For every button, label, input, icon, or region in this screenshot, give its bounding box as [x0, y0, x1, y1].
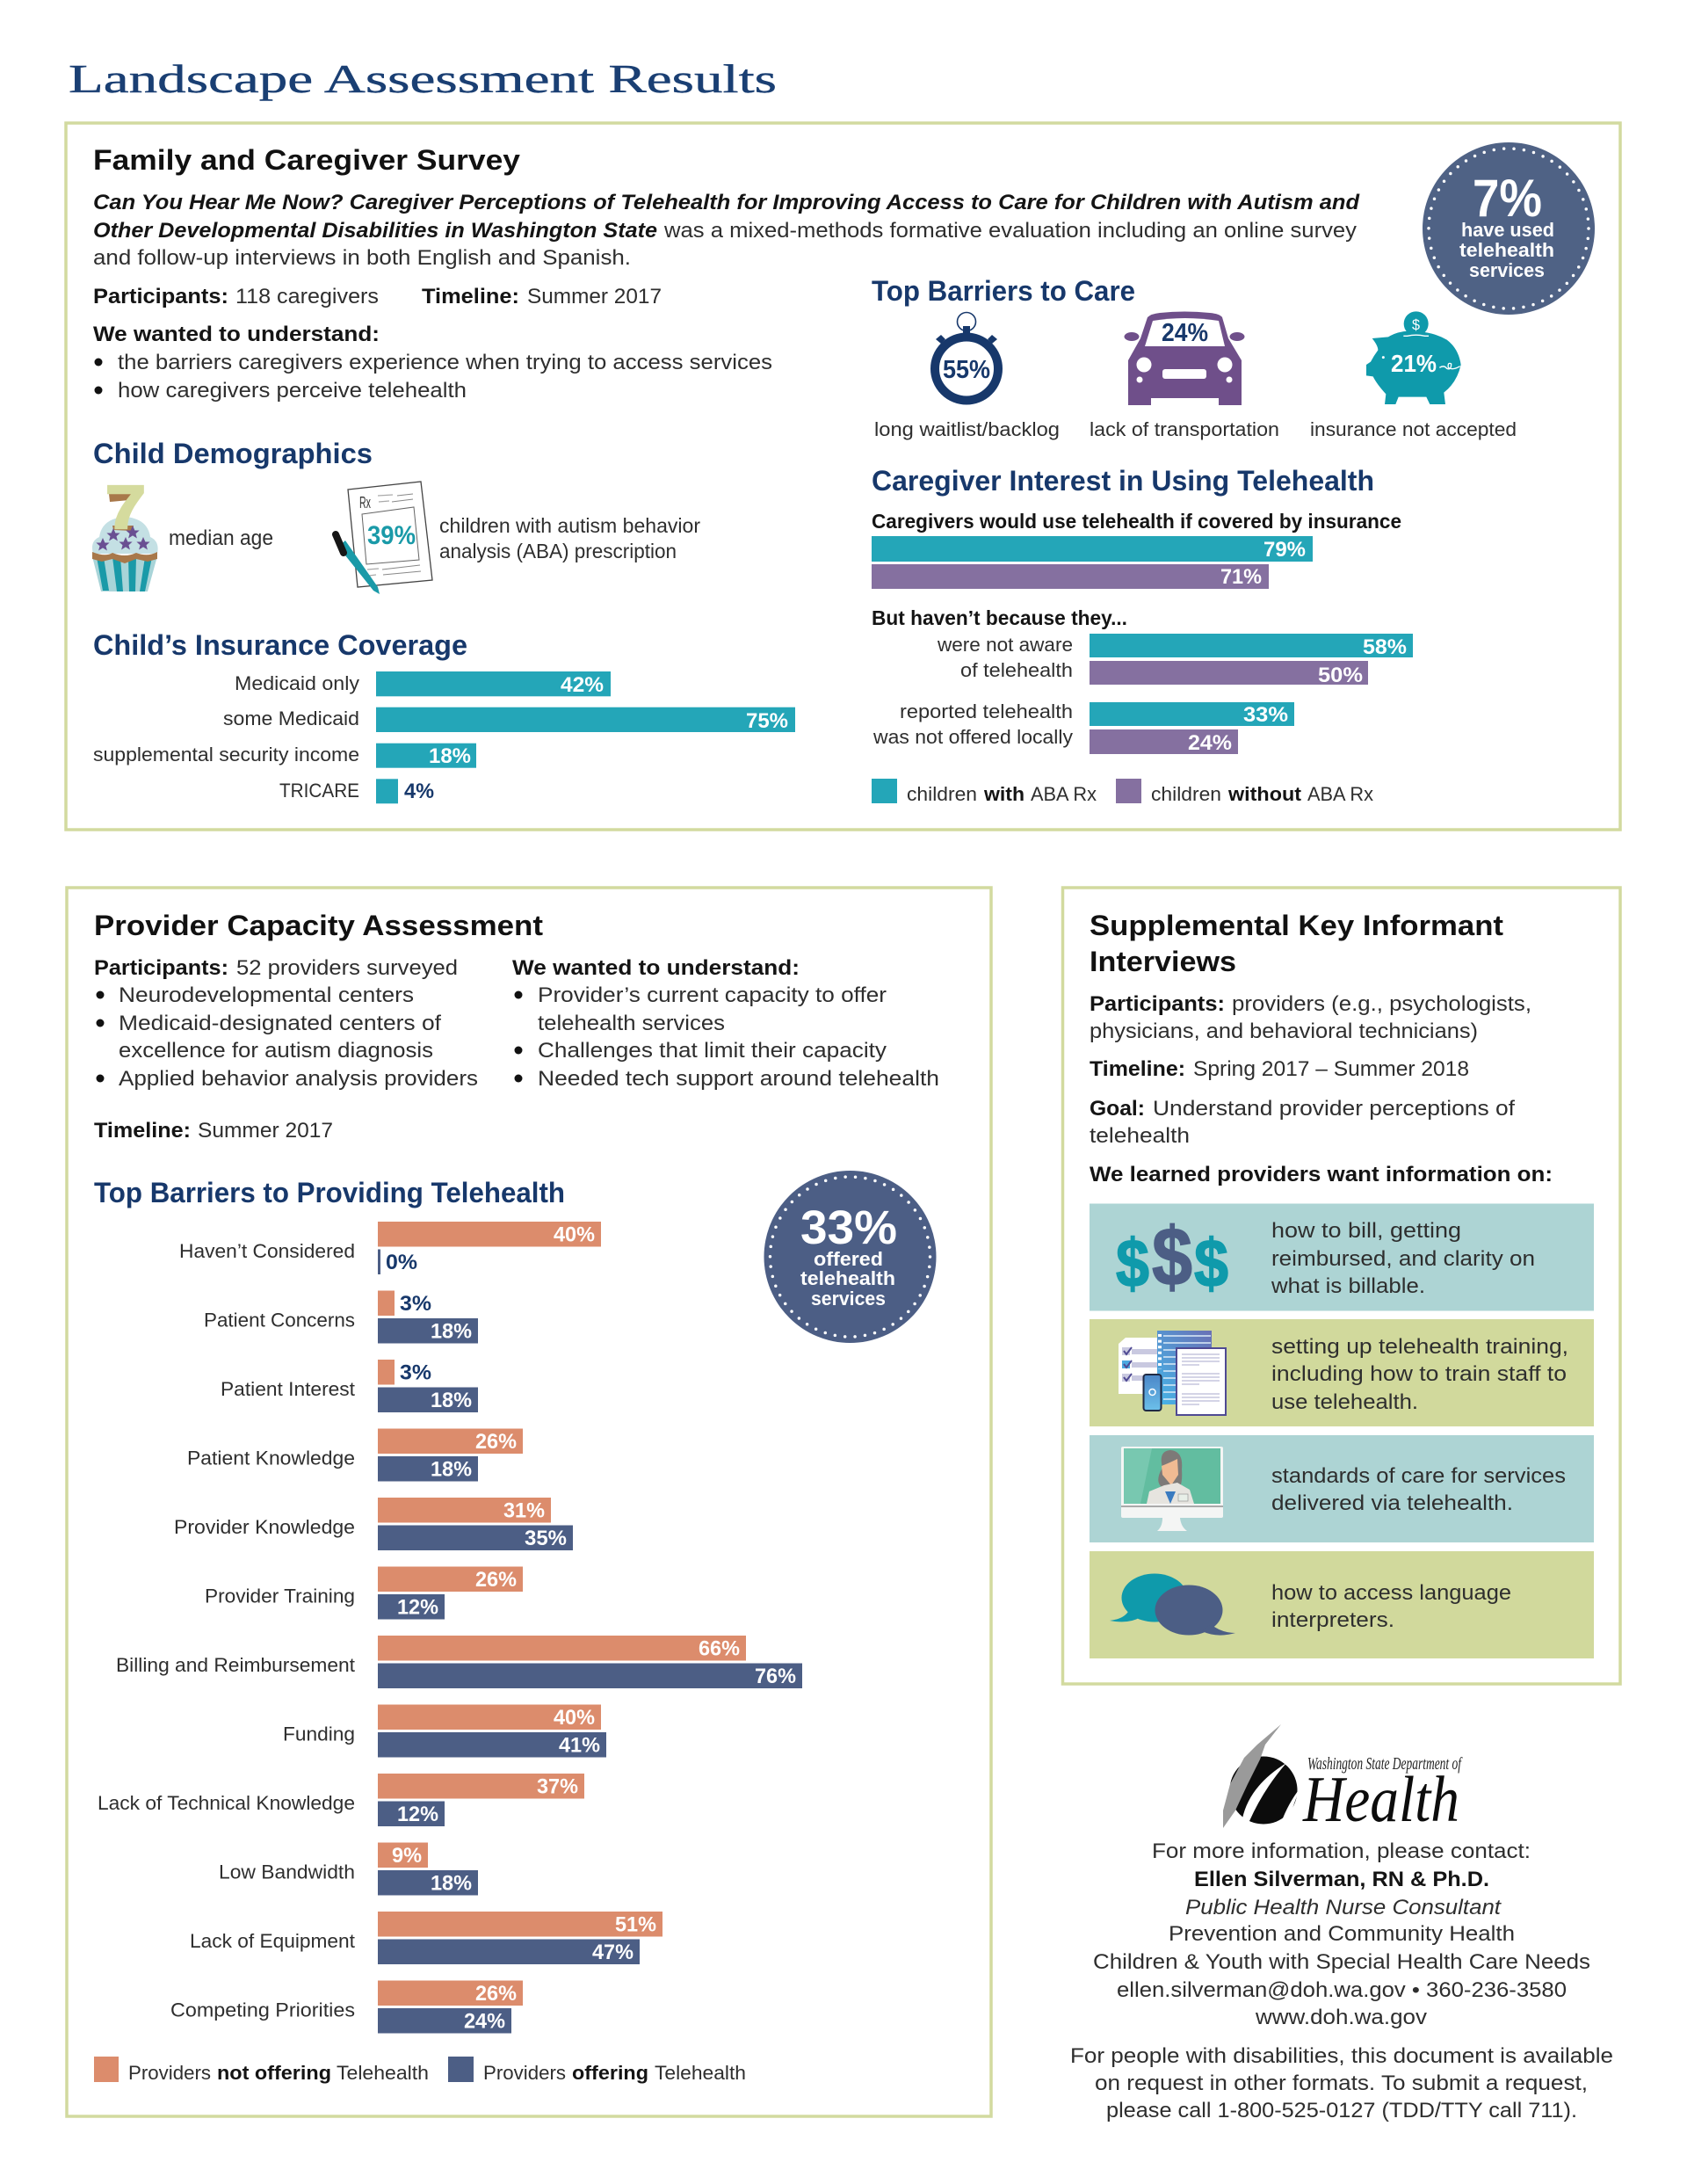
row: patient knowledge — [187, 1429, 523, 1482]
icon: piggy bank 21 percent: 21% — [1391, 350, 1437, 377]
bar chart: caregivers would use telehealth — [872, 510, 1401, 589]
heading: child's insurance coverage: Child’s Insurance Coverage — [93, 629, 467, 661]
card: billing information: how to bill, getting — [1271, 1219, 1461, 1243]
bar chart: insurance coverage — [93, 671, 795, 803]
bar chart: why caregivers have not used telehealth: 33% — [1243, 703, 1288, 727]
row: lack of technical knowledge: Lack of Technical Knowledge — [98, 1792, 355, 1814]
badge: 33 percent offered telehealth: offered — [814, 1248, 883, 1270]
row: funding: 40% — [554, 1706, 595, 1730]
survey description: Can You Hear Me Now? Caregiver Perceptions of Telehealth for Improving Access to Care for Children with Autism and — [93, 191, 1360, 214]
contact information: Children & Youth with Special Health Care Needs — [1093, 1950, 1590, 1974]
participants list: Neurodevelopmental centers — [119, 983, 414, 1007]
icon: prescription pad with 39 percent: Rx — [359, 494, 371, 512]
row: competing priorities — [170, 1981, 523, 2034]
legend: ABA prescription — [872, 779, 1373, 805]
row: provider knowledge: 35% — [525, 1527, 567, 1550]
participants and timeline: 118 caregivers — [235, 285, 379, 308]
goal: Goal: — [1090, 1097, 1145, 1121]
bar chart: insurance coverage: 75% — [746, 709, 788, 733]
icon: dollar signs: $ — [1116, 1226, 1149, 1302]
legend: ABA prescription: ABA Rx — [1307, 783, 1373, 805]
participants: Participants: — [1090, 992, 1225, 1016]
row: billing and reimbursement: 66% — [699, 1636, 740, 1661]
bar chart: insurance coverage: supplemental security income — [93, 744, 359, 765]
heading: supplemental key informant interviews — [1090, 910, 1503, 977]
legend: providers offering telehealth: Providers — [483, 2062, 566, 2084]
icon: piggy bank 21 percent: $ — [1412, 316, 1421, 333]
row: patient knowledge: 26% — [475, 1430, 517, 1454]
accessibility note — [1070, 2044, 1613, 2122]
participants list: Medicaid-designated centers of — [119, 1012, 441, 1035]
panel: provider capacity assessment — [67, 888, 991, 2116]
badge: 33 percent offered telehealth — [764, 1171, 937, 1343]
contact information — [1093, 1839, 1590, 2029]
goal: telehealth — [1090, 1124, 1190, 1148]
timeline: Summer 2017 — [198, 1119, 333, 1143]
row: billing and reimbursement: Billing and Reimbursement — [116, 1654, 355, 1676]
text: median age: median age — [169, 526, 273, 550]
row: competing priorities: 24% — [464, 2009, 505, 2034]
row: funding: Funding — [283, 1723, 355, 1745]
participants: providers (e.g., psychologists, — [1232, 992, 1531, 1016]
bar chart: why caregivers have not used telehealth: 58% — [1363, 635, 1407, 659]
bar chart: insurance coverage: 42% — [561, 673, 604, 697]
card: language interpreters — [1090, 1551, 1594, 1658]
card: billing information — [1090, 1204, 1594, 1311]
row: lack of equipment: 51% — [615, 1912, 656, 1937]
row: lack of equipment: Lack of Equipment — [190, 1930, 355, 1952]
survey description: and follow-up interviews in both English and Spanish. — [93, 246, 631, 270]
contact information: Public Health Nurse Consultant — [1185, 1896, 1502, 1919]
icon: prescription pad with 39 percent — [336, 482, 432, 594]
participants list: Participants: — [94, 956, 228, 980]
row: haven't considered: Haven’t Considered — [179, 1240, 355, 1262]
panel: family and caregiver survey — [66, 123, 1620, 830]
row: competing priorities: 26% — [475, 1982, 517, 2006]
card: standards of care: delivered via telehealth. — [1271, 1491, 1513, 1515]
we wanted to understand list: the barriers caregivers experience when trying to access services — [118, 351, 772, 374]
row: provider knowledge — [174, 1498, 573, 1550]
row: haven't considered: 40% — [554, 1223, 595, 1246]
row: patient knowledge: 18% — [431, 1457, 472, 1482]
row: patient concerns: 18% — [431, 1320, 472, 1343]
row: provider training — [205, 1566, 523, 1619]
card: standards of care: standards of care for services — [1271, 1464, 1566, 1488]
icon: stopwatch 55 percent — [935, 313, 998, 401]
barrier labels — [874, 418, 1517, 440]
heading: supplemental key informant interviews: Supplemental Key Informant — [1090, 910, 1503, 941]
legend: providers offering telehealth — [94, 2057, 746, 2084]
we wanted to understand list: Provider’s current capacity to offer — [538, 983, 887, 1007]
badge: 7 percent used telehealth: telehealth — [1459, 239, 1554, 261]
row: lack of equipment — [190, 1912, 662, 1964]
bar chart: why caregivers have not used telehealth: was not offered locally — [872, 726, 1073, 748]
card: billing information: what is billable. — [1271, 1274, 1425, 1298]
logo: Washington State Department of Health: Washington State Department of — [1307, 1754, 1463, 1774]
row: lack of equipment: 47% — [592, 1941, 634, 1964]
text: ABA prescription label: children with autism behavior — [439, 514, 700, 537]
icon: stopwatch 55 percent: 55% — [943, 356, 990, 384]
logo: Washington State Department of Health: Health — [1302, 1764, 1459, 1836]
barrier labels: insurance not accepted — [1310, 418, 1517, 440]
row: low bandwidth: 18% — [431, 1872, 472, 1895]
bar chart: why caregivers have not used telehealth: But haven’t because they... — [872, 606, 1127, 629]
row: competing priorities: Competing Priorities — [170, 1999, 355, 2021]
icon: piggy bank 21 percent — [1366, 311, 1461, 404]
row: lack of technical knowledge — [98, 1774, 584, 1826]
we wanted to understand list — [93, 323, 772, 403]
icon: documents and phone — [1119, 1331, 1226, 1415]
bar chart: caregivers would use telehealth: Caregivers would use telehealth if covered by insurance — [872, 510, 1401, 533]
legend: providers offering telehealth: not offering — [217, 2062, 331, 2084]
participants — [1090, 992, 1531, 1043]
badge: 7 percent used telehealth — [1423, 142, 1595, 315]
legend: providers offering telehealth: Telehealth — [655, 2062, 746, 2084]
heading: provider capacity assessment: Provider Capacity Assessment — [94, 910, 543, 941]
we wanted to understand list: Needed tech support around telehealth — [538, 1067, 939, 1091]
accessibility note: please call 1-800-525-0127 (TDD/TTY call 711). — [1106, 2099, 1577, 2122]
row: patient interest: 18% — [431, 1389, 472, 1412]
we wanted to understand list: Challenges that limit their capacity — [538, 1039, 887, 1063]
text: ABA prescription label — [439, 514, 700, 562]
bar chart: why caregivers have not used telehealth — [872, 606, 1413, 755]
bar chart: insurance coverage: 4% — [404, 780, 434, 803]
we wanted to understand list: We wanted to understand: — [93, 323, 380, 346]
bar chart: why caregivers have not used telehealth: were not aware — [937, 634, 1073, 656]
card: telehealth training: setting up telehealth training, — [1271, 1335, 1568, 1359]
contact information: ellen.silverman@doh.wa.gov • 360-236-3580 — [1117, 1978, 1567, 2002]
timeline: Timeline: — [94, 1119, 191, 1143]
accessibility note: on request in other formats. To submit a request, — [1095, 2072, 1588, 2095]
contact information: Prevention and Community Health — [1169, 1922, 1515, 1946]
text: ABA prescription label: analysis (ABA) prescription — [439, 540, 677, 562]
participants and timeline: Summer 2017 — [527, 285, 662, 308]
logo: Washington State Department of Health — [1223, 1724, 1463, 1836]
we learned heading: We learned providers want information on: — [1090, 1163, 1553, 1186]
bar chart: why caregivers have not used telehealth: of telehealth — [960, 659, 1073, 681]
legend: ABA prescription: children — [907, 783, 977, 805]
heading: supplemental key informant interviews: Interviews — [1090, 946, 1236, 977]
badge: 7 percent used telehealth: 7% — [1473, 169, 1542, 228]
timeline: Spring 2017 – Summer 2018 — [1193, 1057, 1469, 1081]
legend: providers offering telehealth: Telehealth — [337, 2062, 429, 2084]
bar chart: why caregivers have not used telehealth: 50% — [1318, 664, 1363, 687]
row: patient interest: 3% — [400, 1360, 431, 1385]
row: billing and reimbursement — [116, 1636, 802, 1688]
bar chart: why caregivers have not used telehealth: reported telehealth — [900, 700, 1073, 722]
row: patient concerns: 3% — [400, 1292, 431, 1316]
legend: providers offering telehealth: offering — [572, 2062, 648, 2084]
icon: dollar signs: $ — [1194, 1226, 1228, 1302]
bar chart: insurance coverage: Medicaid only — [235, 672, 359, 694]
contact information: Ellen Silverman, RN & Ph.D. — [1194, 1868, 1489, 1891]
badge: 7 percent used telehealth: have used — [1461, 219, 1554, 241]
bar chart: top barriers to providing telehealth — [98, 1222, 802, 2034]
row: funding: 41% — [559, 1733, 600, 1758]
badge: 33 percent offered telehealth: telehealth — [800, 1267, 895, 1289]
participants and timeline — [93, 285, 662, 308]
row: low bandwidth — [219, 1842, 478, 1895]
badge: 33 percent offered telehealth: services — [811, 1288, 886, 1310]
survey description: was a mixed-methods formative evaluation including an online survey — [663, 219, 1357, 243]
we wanted to understand list: telehealth services — [538, 1012, 725, 1035]
participants and timeline: Timeline: — [422, 285, 519, 308]
we wanted to understand list: We wanted to understand: — [512, 956, 800, 980]
row: low bandwidth: Low Bandwidth — [219, 1861, 355, 1883]
icon: monitor with clinician — [1121, 1447, 1223, 1531]
barrier labels: lack of transportation — [1090, 418, 1279, 440]
legend: ABA prescription: without — [1227, 783, 1302, 805]
bar chart: insurance coverage: TRICARE — [279, 780, 359, 802]
participants: physicians, and behavioral technicians) — [1090, 1019, 1478, 1043]
we wanted to understand list: how caregivers perceive telehealth — [118, 379, 467, 403]
bar chart: why caregivers have not used telehealth: 24% — [1188, 731, 1232, 755]
icon: cupcake with 7 candle: 7 — [105, 473, 146, 541]
bar chart: insurance coverage: some Medicaid — [223, 707, 359, 729]
card: standards of care — [1090, 1435, 1594, 1542]
participants list — [94, 956, 478, 1091]
heading: top barriers to care: Top Barriers to Care — [872, 275, 1135, 307]
survey description — [93, 191, 1360, 270]
row: provider knowledge: Provider Knowledge — [174, 1516, 355, 1538]
heading: caregiver interest in using telehealth: Caregiver Interest in Using Telehealth — [872, 465, 1374, 497]
participants list: excellence for autism diagnosis — [119, 1039, 433, 1063]
card: billing information: reimbursed, and clarity on — [1271, 1247, 1535, 1271]
barrier labels: long waitlist/backlog — [874, 418, 1060, 440]
icon: dollar signs — [1116, 1210, 1228, 1302]
contact information: www.doh.wa.gov — [1255, 2006, 1427, 2029]
row: funding — [283, 1705, 606, 1758]
timeline: Timeline: — [1090, 1057, 1185, 1081]
card: telehealth training: use telehealth. — [1271, 1390, 1418, 1414]
icon: car 24 percent — [1125, 311, 1244, 405]
row: lack of technical knowledge: 37% — [537, 1775, 578, 1798]
badge: 7 percent used telehealth: services — [1469, 259, 1545, 281]
icon: car 24 percent: 24% — [1162, 319, 1208, 347]
bar chart: caregivers would use telehealth: 79% — [1263, 538, 1306, 562]
accessibility note: For people with disabilities, this document is available — [1070, 2044, 1613, 2068]
legend: ABA prescription: children — [1151, 783, 1221, 805]
goal: Understand provider perceptions of — [1153, 1097, 1515, 1121]
row: patient interest — [221, 1360, 478, 1412]
row: provider training: 12% — [397, 1596, 438, 1619]
icon: prescription pad with 39 percent: 39% — [367, 521, 416, 550]
row: low bandwidth: 9% — [392, 1844, 422, 1868]
legend: providers offering telehealth: Providers — [128, 2062, 211, 2084]
icon: cupcake with 7 candle — [92, 473, 158, 591]
icon: speech bubbles — [1110, 1573, 1235, 1636]
timeline — [94, 1119, 333, 1143]
goal — [1090, 1097, 1515, 1148]
card: telehealth training: including how to train staff to — [1271, 1362, 1567, 1386]
card: language interpreters: interpreters. — [1271, 1608, 1394, 1632]
card: telehealth training — [1090, 1319, 1594, 1426]
bar chart: caregivers would use telehealth: 71% — [1220, 565, 1262, 589]
panel: supplemental key informant interviews — [1063, 888, 1620, 1684]
participants and timeline: Participants: — [93, 285, 228, 308]
icon: dollar signs: $ — [1152, 1210, 1192, 1302]
title: Landscape Assessment Results — [69, 57, 777, 101]
participants list: Applied behavior analysis providers — [119, 1067, 478, 1091]
badge: 33 percent offered telehealth: 33% — [800, 1201, 897, 1254]
row: haven't considered — [179, 1222, 601, 1274]
survey description: Other Developmental Disabilities in Washington State — [93, 219, 657, 243]
row: haven't considered: 0% — [386, 1251, 417, 1274]
row: patient interest: Patient Interest — [221, 1378, 355, 1400]
row: patient knowledge: Patient Knowledge — [187, 1447, 355, 1469]
row: patient concerns — [204, 1290, 478, 1343]
card: language interpreters: how to access language — [1271, 1581, 1511, 1605]
row: lack of technical knowledge: 12% — [397, 1803, 438, 1826]
row: provider training: Provider Training — [205, 1585, 355, 1607]
row: patient concerns: Patient Concerns — [204, 1310, 355, 1331]
row: provider training: 26% — [475, 1568, 517, 1592]
heading: child demographics: Child Demographics — [93, 438, 373, 469]
legend: ABA prescription: ABA Rx — [1031, 783, 1097, 805]
we wanted to understand list — [512, 956, 939, 1091]
row: provider knowledge: 31% — [503, 1499, 545, 1522]
row: billing and reimbursement: 76% — [755, 1665, 796, 1688]
participants list: 52 providers surveyed — [236, 956, 458, 980]
legend: ABA prescription: with — [983, 783, 1025, 805]
heading: top barriers to providing telehealth: Top Barriers to Providing Telehealth — [94, 1177, 565, 1208]
heading: family and caregiver survey: Family and Caregiver Survey — [93, 144, 520, 176]
bar chart: insurance coverage: 18% — [429, 744, 471, 768]
contact information: For more information, please contact: — [1152, 1839, 1531, 1863]
